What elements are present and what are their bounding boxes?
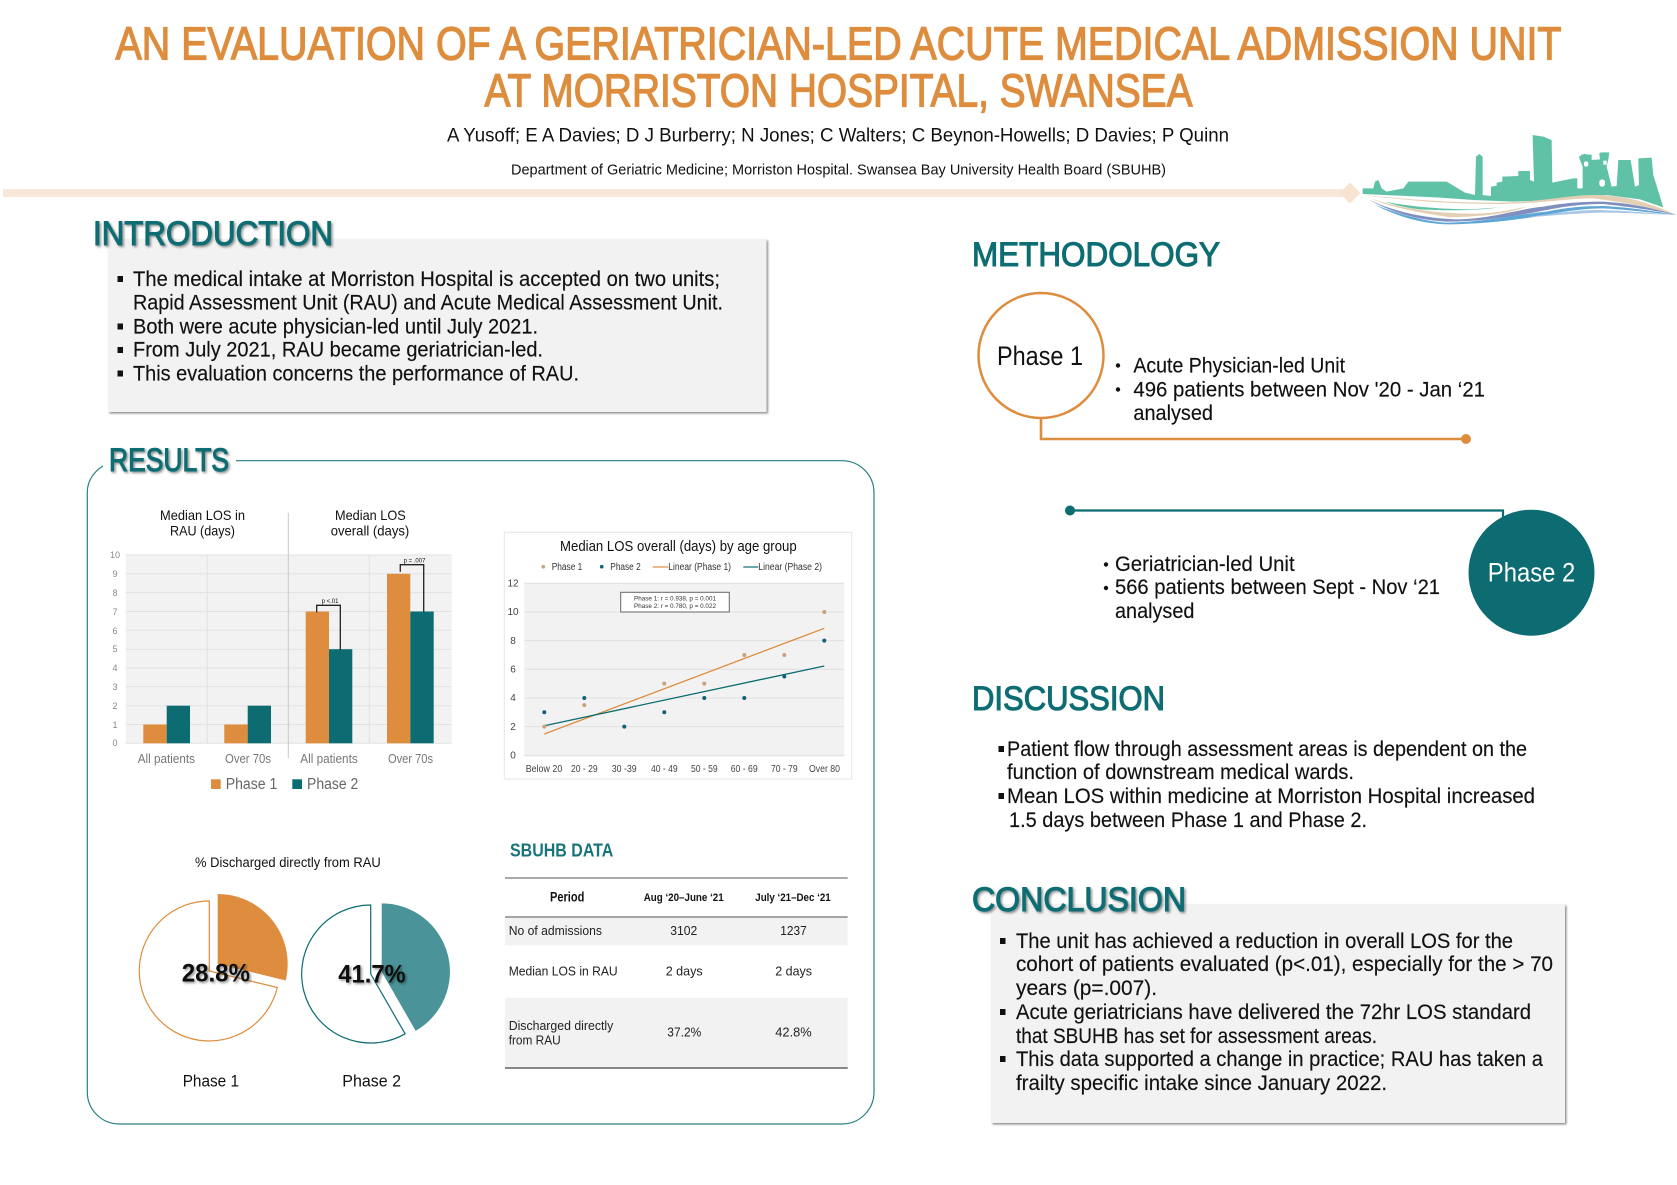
introduction bullet list: From July 2021, RAU became geriatrician-led.	[133, 339, 543, 362]
legend: Phase 1	[226, 776, 277, 793]
phase 2 bullets: 566 patients between Sept - Nov ‘21	[1115, 576, 1440, 599]
introduction bullet list: This evaluation concerns the performance of RAU.	[133, 362, 579, 385]
y axis labels: 8	[112, 588, 118, 598]
pie charts: percent discharged	[139, 855, 450, 1091]
scatter chart: LOS by age group	[504, 532, 852, 779]
chart titles: Median LOS in	[160, 507, 245, 523]
row: discharged	[509, 1018, 812, 1047]
table: SBUHB data	[505, 841, 848, 1068]
phase 2 connector	[1065, 506, 1503, 517]
phase 1 bullets: analysed	[1133, 402, 1213, 425]
pie: phase 2: Phase 2	[342, 1072, 401, 1091]
introduction bullet list	[118, 268, 723, 385]
pie title: % Discharged directly from RAU	[195, 855, 381, 870]
row: admissions: No of admissions	[509, 923, 602, 938]
discussion bullet list: function of downstream medical wards.	[1007, 761, 1354, 784]
row: median LOS	[509, 964, 812, 979]
header rule with diamond	[3, 182, 1360, 204]
scatter legend: Phase 2	[610, 562, 641, 573]
phase 1 circle: Phase 1	[997, 341, 1083, 371]
introduction bullet list: The medical intake at Morriston Hospital is accepted on two units;	[133, 268, 720, 291]
panel: results	[87, 442, 874, 1124]
scatter legend: Linear (Phase 1)	[668, 562, 731, 573]
table heading: SBUHB DATA	[510, 841, 613, 861]
pie: phase 1	[139, 894, 288, 1091]
table header row: Aug ‘20–June ‘21	[644, 892, 724, 904]
heading: results: RESULTS	[109, 442, 229, 478]
conclusion bullet list: The unit has achieved a reduction in overall LOS for the	[1016, 930, 1513, 953]
title	[116, 18, 1562, 116]
conclusion bullet list: frailty specific intake since January 2022.	[1016, 1072, 1387, 1095]
significance brackets: p = .007	[404, 558, 426, 564]
scatter x axis: 50 - 59	[691, 763, 718, 775]
conclusion bullet list: that SBUHB has set for assessment areas.	[1016, 1025, 1377, 1048]
scatter x axis: 30 -39	[612, 763, 637, 775]
table header row: Period	[550, 890, 584, 905]
row: admissions	[509, 923, 807, 938]
heading: methodology: METHODOLOGY	[972, 236, 1220, 274]
heading: conclusion: CONCLUSION	[972, 881, 1186, 919]
significance brackets: p <.01	[322, 599, 339, 605]
row: admissions: 3102	[670, 923, 697, 938]
table header row: July ‘21–Dec ‘21	[755, 892, 831, 904]
bar chart: median LOS	[110, 507, 452, 793]
wave bands	[1363, 195, 1677, 224]
phase 2 bullets	[1104, 553, 1440, 623]
correlation annotation: Phase 1: r = 0.938, p = 0.001	[634, 596, 717, 602]
department: Department of Geriatric Medicine; Morriston Hospital. Swansea Bay University Health Board (SBUHB)	[511, 162, 1166, 178]
table header row	[550, 890, 831, 905]
y axis labels: 0	[112, 738, 118, 748]
scatter legend	[542, 562, 822, 573]
y axis labels: 3	[112, 682, 118, 692]
authors: A Yusoff; E A Davies; D J Burberry; N Jones; C Walters; C Beynon-Howells; D Davies; P Quinn	[447, 125, 1229, 147]
scatter y axis: 0	[510, 750, 516, 762]
phase 1 circle	[978, 293, 1104, 418]
heading: discussion: DISCUSSION	[972, 680, 1165, 718]
scatter y axis: 8	[510, 636, 516, 647]
phase 1 points	[542, 610, 826, 729]
scatter x axis: 20 - 29	[571, 763, 598, 775]
correlation annotation: Phase 2: r = 0.780, p = 0.022	[634, 604, 717, 610]
y axis labels	[110, 550, 120, 748]
scatter y axis: 10	[507, 607, 519, 618]
discussion bullet list: Patient flow through assessment areas is dependent on the	[1007, 738, 1527, 761]
scatter x axis: 40 - 49	[651, 763, 678, 775]
discussion bullet list	[998, 738, 1535, 832]
pie: phase 2: 41.7%	[338, 960, 406, 988]
chart titles: overall (days)	[331, 523, 409, 539]
phase 2 bullets: analysed	[1115, 600, 1194, 623]
heading: introduction: INTRODUCTION	[93, 215, 333, 253]
category labels: Over 70s	[225, 751, 271, 766]
phase 1 bullets	[1116, 354, 1485, 425]
pie: phase 1: Phase 1	[183, 1072, 239, 1091]
icon: Swansea skyline with waves	[1363, 135, 1677, 224]
y axis labels: 6	[112, 626, 118, 636]
row: discharged: 42.8%	[775, 1025, 812, 1040]
panel: methodology	[972, 236, 1594, 636]
phase 2 circle	[1468, 510, 1594, 636]
introduction bullet list: Both were acute physician-led until July 2021.	[133, 315, 538, 338]
scatter y axis: 6	[510, 664, 516, 676]
legend: Phase 2	[307, 776, 358, 793]
phase 1 connector	[1041, 418, 1471, 444]
panel: introduction	[93, 215, 766, 412]
discussion bullet list: 1.5 days between Phase 1 and Phase 2.	[1009, 809, 1367, 832]
scatter x axis	[526, 763, 840, 775]
phase 1 bullets: Acute Physician-led Unit	[1133, 354, 1345, 377]
discussion bullet list: Mean LOS within medicine at Morriston Hospital increased	[1007, 785, 1535, 808]
y axis labels: 9	[112, 569, 118, 579]
bars	[143, 574, 434, 743]
trend lines	[544, 628, 824, 734]
scatter title: Median LOS overall (days) by age group	[560, 539, 797, 555]
scatter legend: Phase 1	[552, 562, 583, 573]
conclusion bullet list: Acute geriatricians have delivered the 72hr LOS standard	[1016, 1001, 1531, 1024]
panel: conclusion	[972, 881, 1565, 1123]
chart titles: Median LOS	[335, 507, 406, 523]
chart titles	[160, 507, 409, 539]
introduction bullet list: Rapid Assessment Unit (RAU) and Acute Medical Assessment Unit.	[133, 292, 723, 315]
y axis labels: 5	[112, 644, 118, 654]
row: discharged: 37.2%	[667, 1025, 702, 1040]
category labels	[138, 751, 433, 766]
panel: discussion	[972, 680, 1535, 832]
scatter x axis: 70 - 79	[771, 763, 798, 775]
scatter y axis: 4	[510, 693, 516, 704]
conclusion bullet list: This data supported a change in practice; RAU has taken a	[1016, 1048, 1543, 1071]
legend	[211, 776, 358, 793]
y axis labels: 7	[112, 607, 118, 617]
pie: phase 1: 28.8%	[182, 960, 250, 988]
correlation annotation	[621, 592, 729, 612]
title: AT MORRISTON HOSPITAL, SWANSEA	[484, 64, 1193, 116]
scatter x axis: 60 - 69	[731, 763, 758, 775]
row: admissions: 1237	[780, 923, 807, 938]
category labels: Over 70s	[388, 751, 433, 766]
conclusion bullet list: cohort of patients evaluated (p<.01), especially for the > 70	[1016, 953, 1553, 976]
y axis labels: 1	[112, 720, 118, 730]
row: discharged: from RAU	[509, 1032, 561, 1047]
y axis labels: 2	[112, 701, 118, 711]
significance brackets	[317, 558, 426, 650]
row: median LOS: Median LOS in RAU	[509, 964, 618, 979]
scatter y axis	[507, 578, 519, 762]
conclusion bullet list: years (p=.007).	[1016, 977, 1157, 1000]
y axis labels: 10	[110, 550, 120, 560]
phase 1 bullets: 496 patients between Nov '20 - Jan ‘21	[1133, 378, 1485, 401]
phase 2 bullets: Geriatrician-led Unit	[1115, 553, 1295, 576]
phase 2 points	[542, 639, 826, 729]
scatter x axis: Below 20	[526, 763, 562, 775]
row: median LOS: 2 days	[666, 964, 703, 979]
category labels: All patients	[300, 751, 358, 766]
y axis labels: 4	[112, 663, 118, 673]
pie: phase 2	[302, 903, 450, 1091]
conclusion bullet list	[1000, 930, 1553, 1095]
row: discharged: Discharged directly	[509, 1018, 614, 1033]
scatter x axis: Over 80	[809, 763, 840, 775]
chart titles: RAU (days)	[170, 523, 235, 539]
category labels: All patients	[138, 751, 195, 766]
phase 2 circle: Phase 2	[1488, 558, 1575, 588]
scatter legend: Linear (Phase 2)	[758, 562, 822, 573]
scatter y axis: 12	[507, 578, 519, 590]
scatter y axis: 2	[510, 722, 516, 733]
row: median LOS: 2 days	[775, 964, 812, 979]
